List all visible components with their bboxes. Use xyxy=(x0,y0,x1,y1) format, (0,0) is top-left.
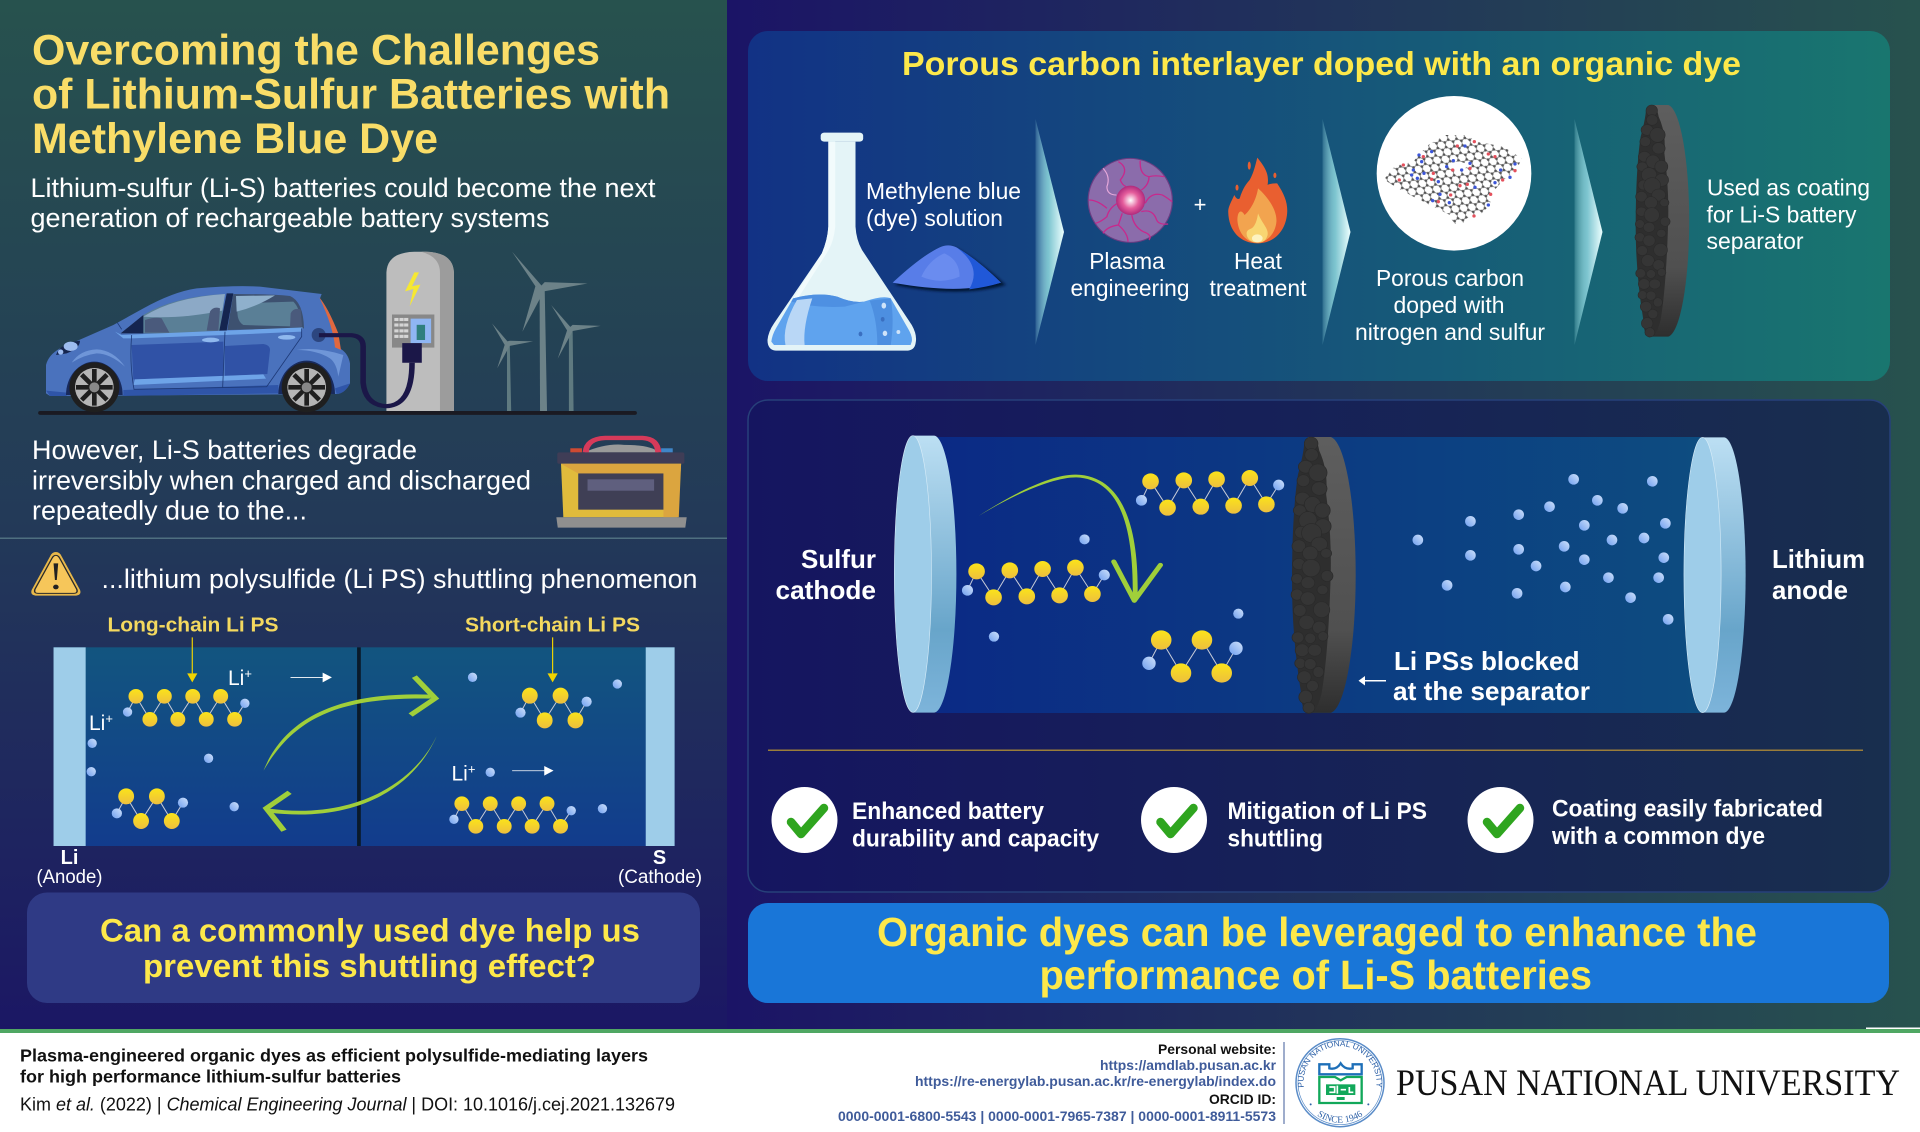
Li+ labels: + xyxy=(468,762,475,776)
panel: battery with interlayer xyxy=(748,400,1890,892)
icon: plasma sphere xyxy=(1088,158,1172,242)
background: left column xyxy=(0,0,727,1030)
icon: charging cable xyxy=(319,335,412,406)
lithium ions xyxy=(989,534,1243,642)
label: sulfur cathode xyxy=(776,544,876,605)
intro text xyxy=(30,173,656,233)
citation xyxy=(20,1046,675,1114)
molecule: left long chain xyxy=(962,560,1110,605)
sulfur cathode disc xyxy=(894,436,956,713)
lithium ions xyxy=(87,673,622,813)
footer xyxy=(0,1028,1920,1128)
callout: conclusion xyxy=(748,903,1889,1003)
icon: porous carbon molecule xyxy=(1377,96,1531,251)
label: heat treatment xyxy=(1210,248,1307,301)
label: anode: (Anode) xyxy=(36,867,102,888)
arrow: step 2 xyxy=(1322,119,1350,345)
label: coating: Used as coating xyxy=(1707,174,1870,200)
callout: conclusion: Organic dyes can be leveraged to enhance the xyxy=(877,909,1757,955)
callout: conclusion: performance of Li-S batteries xyxy=(1040,952,1592,998)
label: Li PSs blocked: Li PSs blocked xyxy=(1394,646,1580,676)
icon: car battery xyxy=(556,438,687,528)
callout: question: Can a commonly used dye help us xyxy=(100,912,640,948)
intro text: generation of rechargeable battery systems xyxy=(30,203,550,233)
text: degradation statement xyxy=(32,435,531,526)
Li+ labels: Li xyxy=(89,712,105,735)
panel heading: Porous carbon interlayer doped with an organic dye xyxy=(902,45,1741,82)
arrow: step 1 xyxy=(1036,119,1064,345)
text: degradation statement: However, Li-S batteries degrade xyxy=(32,435,417,465)
title: of Lithium-Sulfur Batteries with xyxy=(32,71,670,119)
contact details: https://re-energylab.pusan.ac.kr/re-energylab/index.do xyxy=(915,1073,1276,1089)
citation: for high performance lithium-sulfur batteries xyxy=(20,1066,401,1086)
title: Methylene Blue Dye xyxy=(32,115,438,163)
title xyxy=(32,26,670,163)
contact details: https://amdlab.pusan.ac.kr xyxy=(1100,1057,1277,1073)
white direction arrows xyxy=(291,673,554,776)
label: coating: separator xyxy=(1706,228,1804,254)
label: sulfur cathode: cathode xyxy=(776,575,876,605)
label: cathode xyxy=(618,847,702,888)
contact details: 0000-0001-6800-5543 | 0000-0001-7965-7387 | 0000-0001-8911-5573 xyxy=(838,1108,1276,1124)
label: coating: for Li-S battery xyxy=(1706,202,1857,228)
icon: warning triangle xyxy=(31,552,80,596)
label: Li PSs blocked xyxy=(1393,646,1590,706)
label: Li PSs blocked: at the separator xyxy=(1393,676,1590,706)
text: methylene blue xyxy=(866,178,1021,231)
icon: charging station xyxy=(386,252,454,411)
label: plasma engineering: Plasma xyxy=(1089,248,1165,274)
benefit: mitigation xyxy=(1141,787,1427,853)
benefit: mitigation: Mitigation of Li PS xyxy=(1228,798,1427,825)
label: sulfur cathode: Sulfur xyxy=(801,544,876,574)
contact details: ORCID ID: xyxy=(1209,1091,1276,1107)
icon: flame xyxy=(1228,158,1287,243)
icon: electric car xyxy=(46,286,350,412)
separator xyxy=(357,647,361,846)
callout: question xyxy=(27,892,700,1003)
label: cathode: S xyxy=(653,847,666,869)
Li+ labels xyxy=(89,666,475,786)
Li+ labels: Li xyxy=(452,762,468,786)
label: porous carbon xyxy=(1355,265,1545,345)
label: heat treatment: treatment xyxy=(1210,275,1307,301)
molecule: upper long chain xyxy=(1136,470,1284,516)
lithium ions: right portion xyxy=(1412,474,1673,625)
molecule: short chain bottom left xyxy=(112,788,188,829)
label: plasma engineering xyxy=(1070,248,1190,301)
pointer arrows xyxy=(187,637,558,682)
logo: university seal xyxy=(1295,1038,1385,1128)
benefit: common dye: Coating easily fabricated xyxy=(1552,796,1823,822)
cathode electrode xyxy=(646,647,675,846)
battery tube xyxy=(936,437,1701,713)
label: anode: Li xyxy=(61,847,78,869)
Li+ labels: + xyxy=(105,711,113,726)
title: Overcoming the Challenges xyxy=(32,26,600,74)
green arrow: blocked path xyxy=(979,475,1160,601)
background: right column xyxy=(727,0,1920,1030)
label: short-chain Li PS: Short-chain Li PS xyxy=(465,614,640,636)
label: heat treatment: Heat xyxy=(1234,248,1283,274)
logo: university seal: SINCE 1946 xyxy=(1318,1110,1362,1123)
benefit: durability xyxy=(772,787,1100,853)
label: porous carbon: Porous carbon xyxy=(1376,265,1524,291)
molecule: short chain xyxy=(1142,630,1243,683)
label: porous carbon: doped with xyxy=(1394,292,1504,318)
arrow: step 3 xyxy=(1574,119,1602,345)
text: shuttling phenomenon: ...lithium polysulfide (Li PS) shuttling phenomenon xyxy=(102,564,698,594)
label: long-chain Li PS: Long-chain Li PS xyxy=(108,614,278,636)
Li+ labels: Li xyxy=(228,667,244,690)
molecule: short chain top right xyxy=(515,688,592,728)
callout: question: prevent this shuttling effect? xyxy=(143,948,596,984)
text: degradation statement: irreversibly when charged and discharged xyxy=(32,466,531,496)
Li+ labels: + xyxy=(244,666,252,681)
icon: flask and dye powder xyxy=(767,133,1006,351)
label: lithium anode xyxy=(1772,544,1865,605)
anode electrode xyxy=(54,647,86,846)
icon: wind turbines xyxy=(492,252,601,411)
label: coating xyxy=(1706,174,1870,254)
intro text: Lithium-sulfur (Li-S) batteries could become the next xyxy=(30,173,656,203)
molecule: long chain top left xyxy=(123,689,250,727)
molecule: long chain bottom right xyxy=(449,796,576,834)
divider xyxy=(0,538,727,539)
plus sign: + xyxy=(1194,192,1206,217)
contact details xyxy=(838,1041,1277,1124)
label: lithium anode: Lithium xyxy=(1772,544,1865,574)
icon: coated separator xyxy=(1635,105,1689,337)
label: cathode: (Cathode) xyxy=(618,867,702,888)
diagram: shuttling cell xyxy=(54,637,675,846)
benefit: durability: durability and capacity xyxy=(852,826,1100,852)
logo: university seal: PUSAN NATIONAL UNIVERSITY xyxy=(1298,1040,1382,1088)
panel: porous carbon interlayer xyxy=(748,31,1890,381)
interlayer separator xyxy=(1291,437,1356,714)
green arrow: charge xyxy=(264,677,435,771)
benefit: durability: Enhanced battery xyxy=(852,798,1045,825)
arrow: to separator xyxy=(1358,676,1386,686)
left portion of tube contents xyxy=(962,470,1284,683)
text: methylene blue: (dye) solution xyxy=(866,205,1003,231)
benefit: mitigation: shuttling xyxy=(1228,826,1323,852)
label: plasma engineering: engineering xyxy=(1070,275,1190,301)
green arrow: discharge xyxy=(266,736,437,831)
contact details: Personal website: xyxy=(1158,1041,1276,1057)
benefit: common dye xyxy=(1468,787,1823,853)
lithium anode disc xyxy=(1684,437,1746,713)
citation: Plasma-engineered organic dyes as efficient polysulfide-mediating layers xyxy=(20,1046,648,1066)
label: anode xyxy=(36,847,102,888)
text: methylene blue: Methylene blue xyxy=(866,178,1021,204)
text: degradation statement: repeatedly due to the... xyxy=(32,496,307,526)
label: porous carbon: nitrogen and sulfur xyxy=(1355,319,1545,345)
illustration: charger, turbines and ground xyxy=(38,252,637,415)
benefit: common dye: with a common dye xyxy=(1551,823,1765,850)
citation: Kim et al. (2022) | Chemical Engineering Journal | DOI: 10.1016/j.cej.2021.132679 xyxy=(20,1094,675,1114)
label: lithium anode: anode xyxy=(1772,575,1848,605)
